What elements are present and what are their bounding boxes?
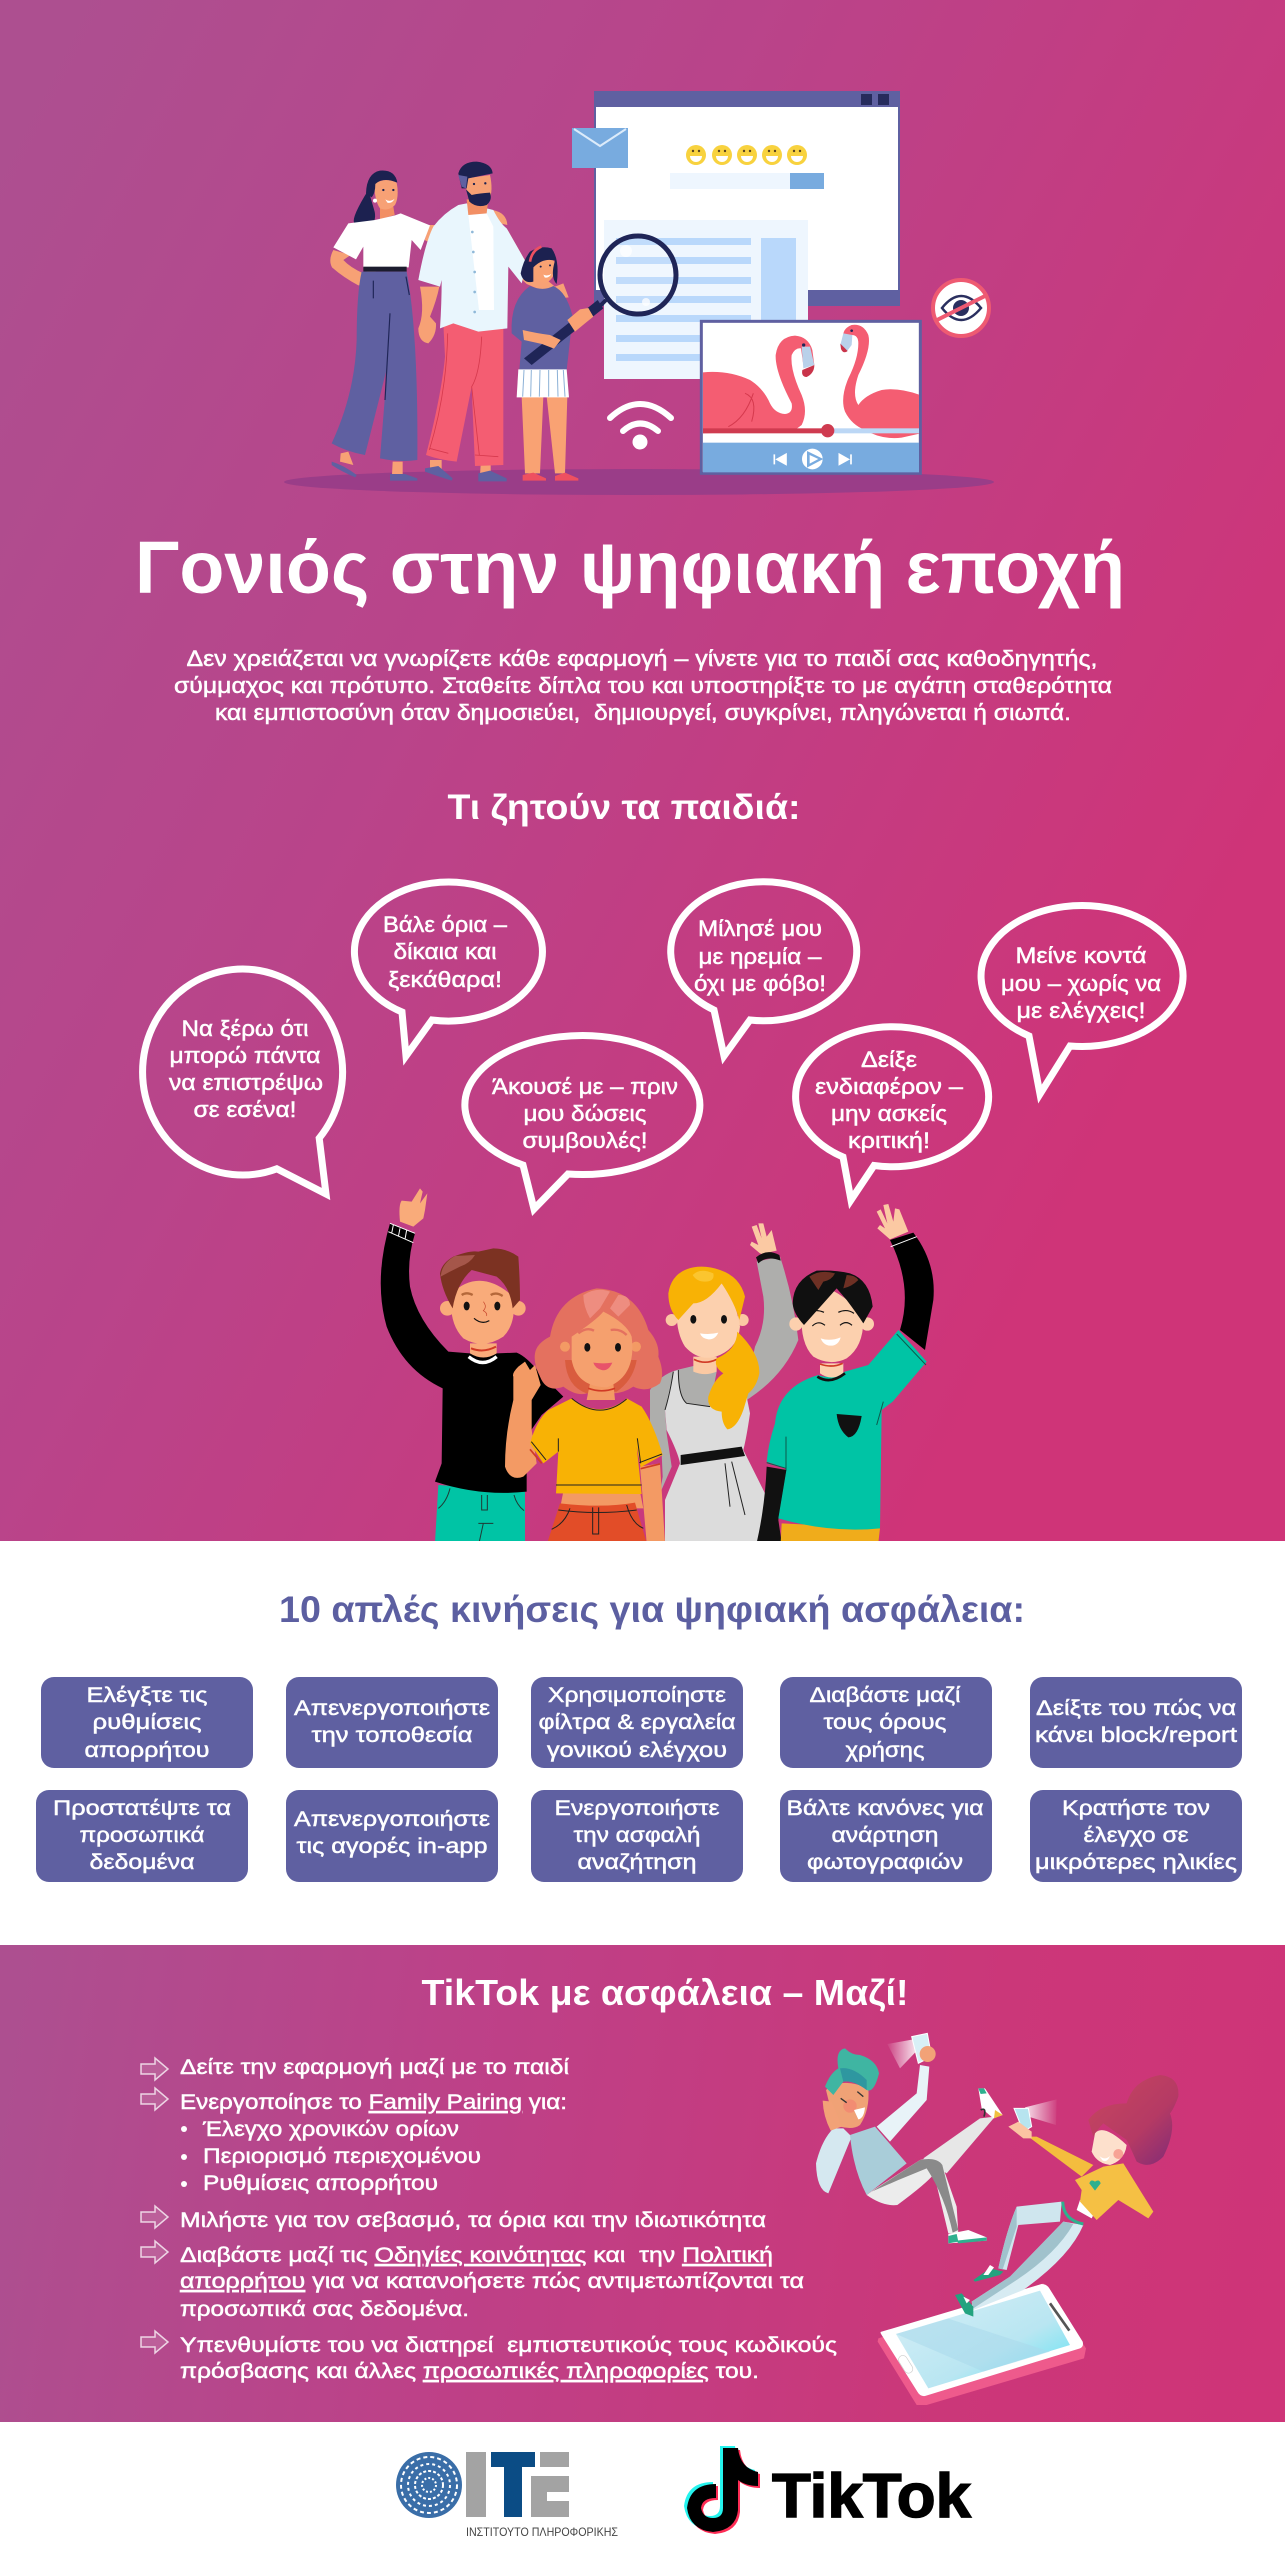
box: filters and parental tools: Χρησιμοποίηστε bbox=[548, 1683, 726, 1707]
box: safe search: Ενεργοποιήστε bbox=[554, 1796, 720, 1820]
speech bubble: set limits: Βάλε όρια – bbox=[383, 912, 508, 937]
document panel bbox=[604, 220, 808, 379]
box: protect personal data: Προστατέψτε τα bbox=[53, 1796, 231, 1820]
speech bubble: listen to me: Άκουσέ με – πριν bbox=[492, 1074, 678, 1099]
speech bubble: come back to you: Να ξέρω ότι bbox=[182, 1016, 309, 1041]
sub-list: Family Pairing features bbox=[181, 2117, 481, 2195]
box: read the terms: Διαβάστε μαζί bbox=[810, 1683, 961, 1707]
box: safe search: την ασφαλή bbox=[574, 1823, 700, 1847]
list: TikTok tips: Διαβάστε μαζί τις Οδηγίες κοινότητας και την Πολιτική bbox=[180, 2243, 773, 2267]
box: photo posting rules: φωτογραφιών bbox=[807, 1850, 963, 1874]
figure: boy in teal shirt bbox=[757, 1204, 934, 1543]
box: safe search: αναζήτηση bbox=[578, 1850, 696, 1874]
illustration: teens falling out of a phone bbox=[816, 2033, 1178, 2405]
icon: arrow bbox=[141, 2206, 168, 2228]
box: disable location bbox=[286, 1677, 498, 1768]
box: control at younger ages: έλεγχο σε bbox=[1084, 1823, 1189, 1847]
figure: father bbox=[418, 162, 569, 481]
speech bubble: show interest: μην ασκείς bbox=[831, 1101, 947, 1126]
box: filters and parental tools bbox=[531, 1677, 743, 1768]
speech bubble: talk calmly: με ηρεμία – bbox=[698, 944, 822, 969]
box: privacy settings bbox=[41, 1677, 253, 1768]
intro paragraph: και εμπιστοσύνη όταν δημοσιεύει, δημιουργεί, συγκρίνει, πληγώνεται ή σιωπά. bbox=[215, 700, 1071, 725]
list: TikTok tips: προσωπικά σας δεδομένα. bbox=[180, 2297, 469, 2321]
icon: arrow bbox=[141, 2241, 168, 2263]
box: block and report: κάνει block/report bbox=[1035, 1723, 1237, 1747]
figures: mother, father and daughter bbox=[330, 162, 603, 481]
sub-list: Family Pairing features: Περιορισμό περιεχομένου bbox=[203, 2144, 481, 2168]
heading: 10 simple moves: 10 απλές κινήσεις για ψηφιακή ασφάλεια: bbox=[279, 1589, 1025, 1630]
icon: arrow bbox=[141, 2331, 168, 2353]
box: block and report bbox=[1030, 1677, 1242, 1768]
box: protect personal data: προσωπικά bbox=[80, 1823, 204, 1847]
speech bubble: come back to you: να επιστρέψω bbox=[169, 1070, 323, 1095]
figure: mother bbox=[330, 171, 435, 481]
box: disable location: Απενεργοποιήστε bbox=[294, 1696, 490, 1720]
icon: video player with flamingos bbox=[701, 321, 928, 473]
list: TikTok tips: Μιλήστε για τον σεβασμό, τα όρια και την ιδιωτικότητα bbox=[180, 2208, 766, 2232]
box: privacy settings: Ελέγξτε τις bbox=[86, 1683, 208, 1707]
speech bubble: show interest: κριτική! bbox=[848, 1128, 930, 1153]
box: disable location: την τοποθεσία bbox=[312, 1723, 472, 1747]
sub-list: Family Pairing features: Ρυθμίσεις απορρήτου bbox=[203, 2171, 438, 2195]
figure: girl with blonde ponytail bbox=[650, 1223, 798, 1543]
box: block and report: Δείξτε του πώς να bbox=[1036, 1696, 1236, 1720]
box: read the terms bbox=[780, 1677, 992, 1768]
box: photo posting rules: Βάλτε κανόνες για bbox=[786, 1796, 984, 1820]
icon: browser window bbox=[594, 91, 900, 306]
intro paragraph: σύμμαχος και πρότυπο. Σταθείτε δίπλα του και υποστηρίξτε το με αγάπη σταθερότητα bbox=[174, 673, 1112, 698]
speech bubble: listen to me: συμβουλές! bbox=[522, 1128, 648, 1153]
icon: big phone bbox=[878, 2283, 1086, 2405]
speech bubble: stay close: Μείνε κοντά bbox=[1016, 943, 1147, 968]
speech bubble: set limits bbox=[354, 882, 542, 1056]
panel: hero and kids gradient section bbox=[0, 0, 1285, 1543]
box: control at younger ages bbox=[1030, 1790, 1242, 1882]
icon: crossed out eye bbox=[933, 280, 989, 336]
title: Γονιός στην ψηφιακή εποχή bbox=[135, 526, 1125, 609]
speech bubble: come back to you: σε εσένα! bbox=[194, 1097, 296, 1122]
box: control at younger ages: Κρατήστε τον bbox=[1062, 1796, 1210, 1820]
panel: TikTok safely together bbox=[0, 1945, 1285, 2422]
box: filters and parental tools: γονικού ελέγχου bbox=[547, 1738, 727, 1762]
speech bubble: come back to you bbox=[143, 969, 343, 1194]
logo: TikTok bbox=[684, 2446, 972, 2534]
box: read the terms: τους όρους bbox=[824, 1710, 946, 1734]
box: photo posting rules: ανάρτηση bbox=[832, 1823, 938, 1847]
figure: girl in yellow top bbox=[505, 1288, 665, 1543]
figure: daughter bbox=[512, 247, 603, 481]
box: read the terms: χρήσης bbox=[846, 1738, 924, 1762]
list: TikTok tips: Δείτε την εφαρμογή μαζί με το παιδί bbox=[180, 2055, 569, 2079]
box: protect personal data: δεδομένα bbox=[90, 1850, 194, 1874]
figure: girl with red hair bbox=[955, 2075, 1178, 2317]
illustration: four teenagers waving bbox=[381, 1188, 934, 1543]
icon: envelope bbox=[572, 128, 628, 168]
icon: arrow bbox=[141, 2058, 168, 2080]
icon: magnifying glass bbox=[590, 236, 676, 316]
intro paragraph bbox=[174, 646, 1112, 725]
logo: Institute of Informatics: ΙΝΣΤΙΤΟΥΤΟ ΠΛΗΡΟΦΟΡΙΚΗΣ bbox=[466, 2525, 618, 2539]
box: safe search bbox=[531, 1790, 743, 1882]
list: TikTok tips: πρόσβασης και άλλες προσωπικές πληροφορίες του. bbox=[180, 2359, 759, 2383]
panel: ten simple moves bbox=[0, 1541, 1285, 1945]
panel: logos footer bbox=[0, 2422, 1285, 2560]
box: privacy settings: ρυθμίσεις bbox=[92, 1710, 202, 1734]
heading: what children ask: Τι ζητούν τα παιδιά: bbox=[448, 788, 800, 827]
logo: TikTok: TikTok bbox=[772, 2462, 972, 2531]
speech bubble: show interest: Δείξε bbox=[861, 1047, 917, 1072]
speech bubble: talk calmly: όχι με φόβο! bbox=[694, 971, 826, 996]
figure: boy in black sweater bbox=[381, 1188, 563, 1543]
list: TikTok tips: Υπενθυμίστε του να διατηρεί εμπιστευτικούς τους κωδικούς bbox=[180, 2333, 837, 2357]
speech bubble: set limits: δίκαια και bbox=[394, 939, 497, 964]
list: TikTok tips: απορρήτου για να κατανοήσετε πώς αντιμετωπίζονται τα bbox=[180, 2269, 804, 2293]
speech bubble: talk calmly bbox=[671, 882, 857, 1056]
intro paragraph: Δεν χρειάζεται να γνωρίζετε κάθε εφαρμογή – γίνετε για το παιδί σας καθοδηγητής, bbox=[186, 646, 1098, 671]
sub-list: Family Pairing features: Έλεγχο χρονικών ορίων bbox=[202, 2117, 459, 2141]
speech bubble: show interest: ενδιαφέρον – bbox=[815, 1074, 964, 1099]
list: TikTok tips bbox=[141, 2055, 837, 2383]
speech bubble: listen to me bbox=[465, 1036, 700, 1209]
speech bubble: set limits: ξεκάθαρα! bbox=[388, 967, 502, 992]
box: disable in-app purchases: τις αγορές in-app bbox=[296, 1834, 488, 1858]
box: privacy settings: απορρήτου bbox=[84, 1738, 210, 1762]
heading: TikTok safely: TikTok με ασφάλεια – Μαζί! bbox=[422, 1972, 908, 2013]
speech bubble: listen to me: μου δώσεις bbox=[524, 1101, 646, 1126]
list: TikTok tips: Ενεργοποίησε το Family Pairing για: bbox=[180, 2090, 567, 2114]
box: photo posting rules bbox=[780, 1790, 992, 1882]
speech bubble: come back to you: μπορώ πάντα bbox=[170, 1043, 321, 1068]
box: disable in-app purchases: Απενεργοποιήστε bbox=[294, 1807, 490, 1831]
box: control at younger ages: μικρότερες ηλικίες bbox=[1035, 1850, 1237, 1874]
logo: Institute of Informatics bbox=[396, 2452, 618, 2539]
box: filters and parental tools: φίλτρα & εργαλεία bbox=[538, 1710, 736, 1734]
figure: boy with teal hair bbox=[816, 2033, 1003, 2243]
speech bubble: show interest bbox=[796, 1027, 989, 1200]
box: disable in-app purchases bbox=[286, 1790, 498, 1882]
box: protect personal data bbox=[36, 1790, 248, 1882]
speech bubble: stay close: με ελέγχεις! bbox=[1016, 998, 1146, 1023]
speech bubble: stay close: μου – χωρίς να bbox=[1001, 971, 1161, 996]
icon: arrow bbox=[141, 2088, 168, 2110]
speech bubble: talk calmly: Μίλησέ μου bbox=[698, 916, 822, 941]
icon: wifi signal bbox=[610, 404, 671, 450]
speech bubble: stay close bbox=[981, 906, 1183, 1094]
illustration: family exploring the internet bbox=[284, 91, 994, 495]
